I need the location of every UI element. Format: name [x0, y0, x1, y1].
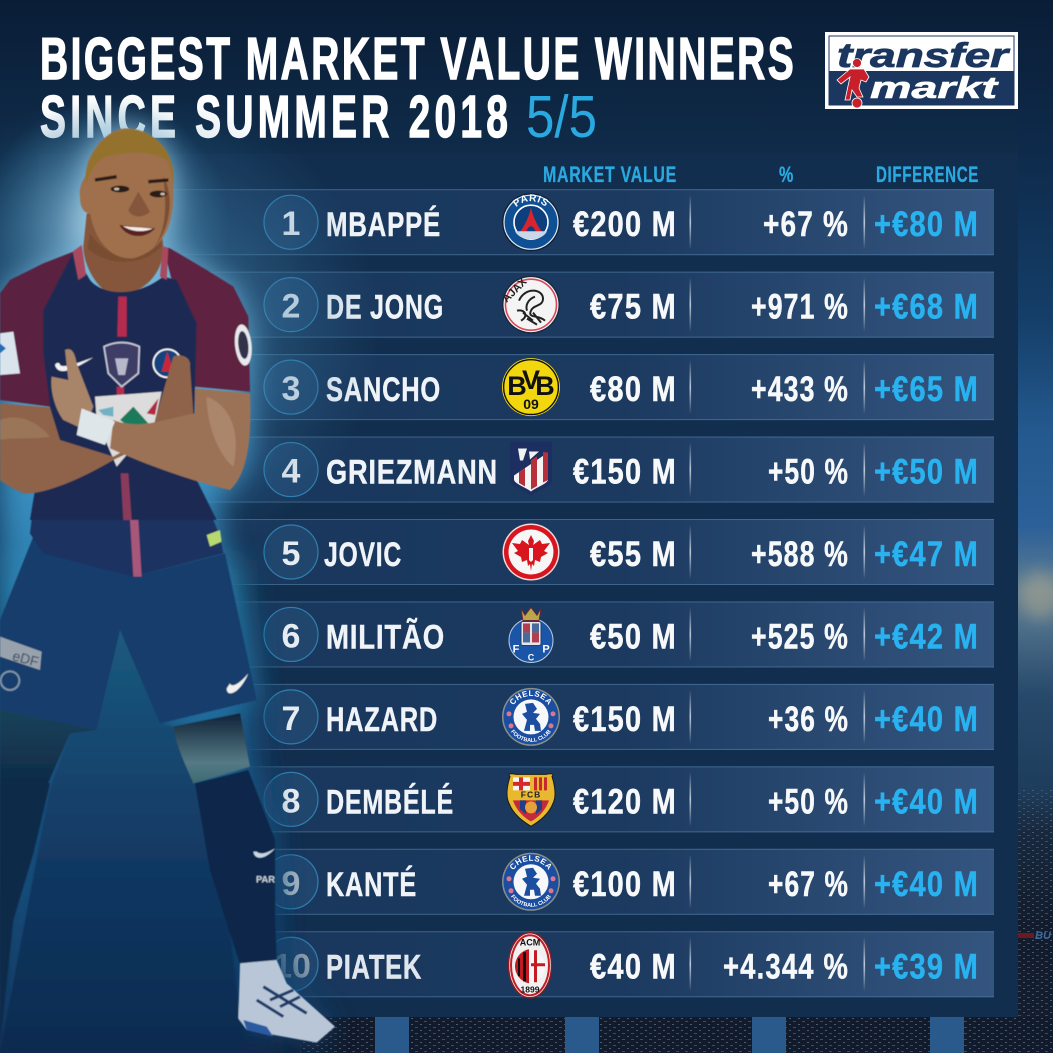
- title: BIGGEST MARKET VALUE WINNERS: [40, 26, 794, 92]
- row 5: Jovic: €55 M: [590, 535, 677, 574]
- logo: PSG: [502, 193, 560, 252]
- row 5: Jovic: [64, 519, 994, 585]
- row 1: Mbappé: [174, 189, 994, 256]
- logo: Chelsea: CHELSEA: [510, 690, 552, 705]
- row 7: Hazard: +€40 M: [874, 700, 979, 739]
- logo: Barcelona: [507, 774, 555, 826]
- logo: Porto: [509, 607, 553, 662]
- row 10: Piatek: 10: [273, 947, 311, 985]
- row 9: Kanté: KANTÉ: [326, 866, 417, 904]
- row 10: Piatek: €40 M: [590, 947, 677, 986]
- row 7: Hazard: €150 M: [573, 700, 677, 739]
- row 4: Griezmann: +€50 M: [874, 453, 979, 492]
- logo: Chelsea: [502, 688, 560, 746]
- row 7: Hazard: [250, 684, 994, 750]
- player lower body: eDF: [11, 647, 41, 670]
- row 3: Sancho: 3: [282, 370, 300, 408]
- row 4: Griezmann: GRIEZMANN: [326, 454, 498, 492]
- player upper body: [0, 128, 254, 520]
- row 1: Mbappé: €200 M: [573, 205, 677, 244]
- row 2: De Jong: +€68 M: [874, 288, 979, 327]
- title: 5/5: [526, 84, 597, 150]
- column headers: %: [779, 162, 794, 187]
- row 8: Dembélé: +50 %: [768, 782, 849, 821]
- logo: Dortmund: [502, 358, 560, 416]
- row 9: Kanté: 9: [282, 865, 300, 903]
- row 3: Sancho: +€65 M: [874, 370, 979, 409]
- row 5: Jovic: 5: [282, 535, 300, 573]
- row 6: Militão: [64, 601, 994, 667]
- row 6: Militão: 6: [282, 617, 300, 655]
- table panel: [38, 154, 1018, 1017]
- row 5: Jovic: +€47 M: [874, 535, 979, 574]
- row 2: De Jong: DE JONG: [326, 289, 444, 327]
- row 10: Piatek: +4.344 %: [723, 947, 849, 986]
- row 10: Piatek: PIATEK: [326, 948, 422, 986]
- row 4: Griezmann: 4: [282, 453, 301, 491]
- logo: Atlético: [510, 442, 552, 496]
- row 1: Mbappé: +67 %: [763, 205, 849, 244]
- row 2: De Jong: 2: [282, 288, 300, 326]
- row 6: Militão: +525 %: [751, 617, 849, 656]
- player glow: [0, 90, 380, 1053]
- row 3: Sancho: SANCHO: [326, 371, 441, 409]
- row 9: Kanté: +67 %: [768, 865, 849, 904]
- row 2: De Jong: [64, 272, 994, 338]
- logo: Porto: C: [528, 652, 535, 662]
- area between the legs: [0, 630, 245, 1053]
- title: SINCE SUMMER 2018: [40, 84, 508, 150]
- row 3: Sancho: +433 %: [751, 370, 849, 409]
- logo: transfermarkt: [825, 32, 1018, 109]
- column headers: DIFFERENCE: [876, 162, 979, 187]
- row 9: Kanté: €100 M: [573, 865, 677, 904]
- logo: Frankfurt: [502, 524, 560, 580]
- row 8: Dembélé: 8: [282, 782, 300, 820]
- row 8: Dembélé: DEMBÉLÉ: [326, 783, 454, 821]
- logo: Dortmund: V: [522, 365, 540, 395]
- logo: PSG: PARIS: [512, 194, 548, 207]
- player lower body: [0, 520, 335, 1043]
- row 1: Mbappé: MBAPPÉ: [326, 206, 441, 244]
- row 7: Hazard: 7: [282, 700, 300, 738]
- logo: Dortmund: B: [507, 371, 527, 401]
- row 2: De Jong: +971 %: [751, 288, 849, 327]
- column headers: MARKET VALUE: [543, 162, 677, 187]
- row 1: Mbappé: +€80 M: [874, 205, 979, 244]
- title: [40, 26, 794, 150]
- row 6: Militão: MILITÃO: [326, 618, 445, 656]
- logo: Ajax: [500, 275, 560, 334]
- logo: Porto: F: [513, 643, 520, 655]
- logo: Chelsea: FOOTBALL CLUB: [511, 894, 551, 907]
- logo: Dortmund: 09: [523, 396, 539, 412]
- row 10: Piatek: [64, 931, 994, 998]
- logo: Chelsea: FOOTBALL CLUB: [511, 730, 551, 742]
- row 5: Jovic: JOVIC: [324, 536, 402, 574]
- row 3: Sancho: [64, 354, 994, 420]
- row 7: Hazard: +36 %: [768, 700, 849, 739]
- row 4: Griezmann: +50 %: [768, 453, 849, 492]
- logo: Dortmund: B: [535, 371, 555, 401]
- logo: AC Milan: 1899: [521, 984, 540, 994]
- row 4: Griezmann: €150 M: [573, 453, 677, 492]
- row 6: Militão: €50 M: [590, 617, 677, 656]
- background: BU: [1035, 930, 1052, 942]
- logo: Barcelona: FCB: [521, 789, 541, 799]
- row 2: De Jong: €75 M: [590, 288, 677, 327]
- logo: AC Milan: ACM: [520, 937, 540, 947]
- row 6: Militão: +€42 M: [874, 617, 979, 656]
- row 5: Jovic: +588 %: [751, 535, 849, 574]
- row 8: Dembélé: [64, 766, 994, 832]
- row 1: Mbappé: 1: [282, 205, 300, 243]
- row 8: Dembélé: €120 M: [573, 782, 677, 821]
- row 8: Dembélé: +€40 M: [874, 782, 979, 821]
- column headers: [543, 162, 979, 187]
- player: Mbappé: [0, 128, 335, 1053]
- row 4: Griezmann: [64, 437, 994, 503]
- row 10: Piatek: +€39 M: [874, 947, 979, 986]
- player lower body: PAR: [256, 874, 275, 884]
- logo: Chelsea: [502, 852, 560, 911]
- logo: transfermarkt: transfer: [837, 37, 1010, 75]
- logo: Chelsea: CHELSEA: [510, 855, 552, 870]
- logo: transfermarkt: markt: [870, 70, 1000, 105]
- icon: red footballer: [837, 58, 869, 108]
- row 9: Kanté: +€40 M: [874, 865, 979, 904]
- logo: Ajax: AJAX: [500, 275, 530, 305]
- logo: Porto: P: [542, 643, 550, 655]
- row 7: Hazard: HAZARD: [326, 701, 438, 739]
- row 3: Sancho: €80 M: [590, 370, 677, 409]
- logo: AC Milan: [508, 933, 552, 998]
- row 9: Kanté: [274, 848, 994, 915]
